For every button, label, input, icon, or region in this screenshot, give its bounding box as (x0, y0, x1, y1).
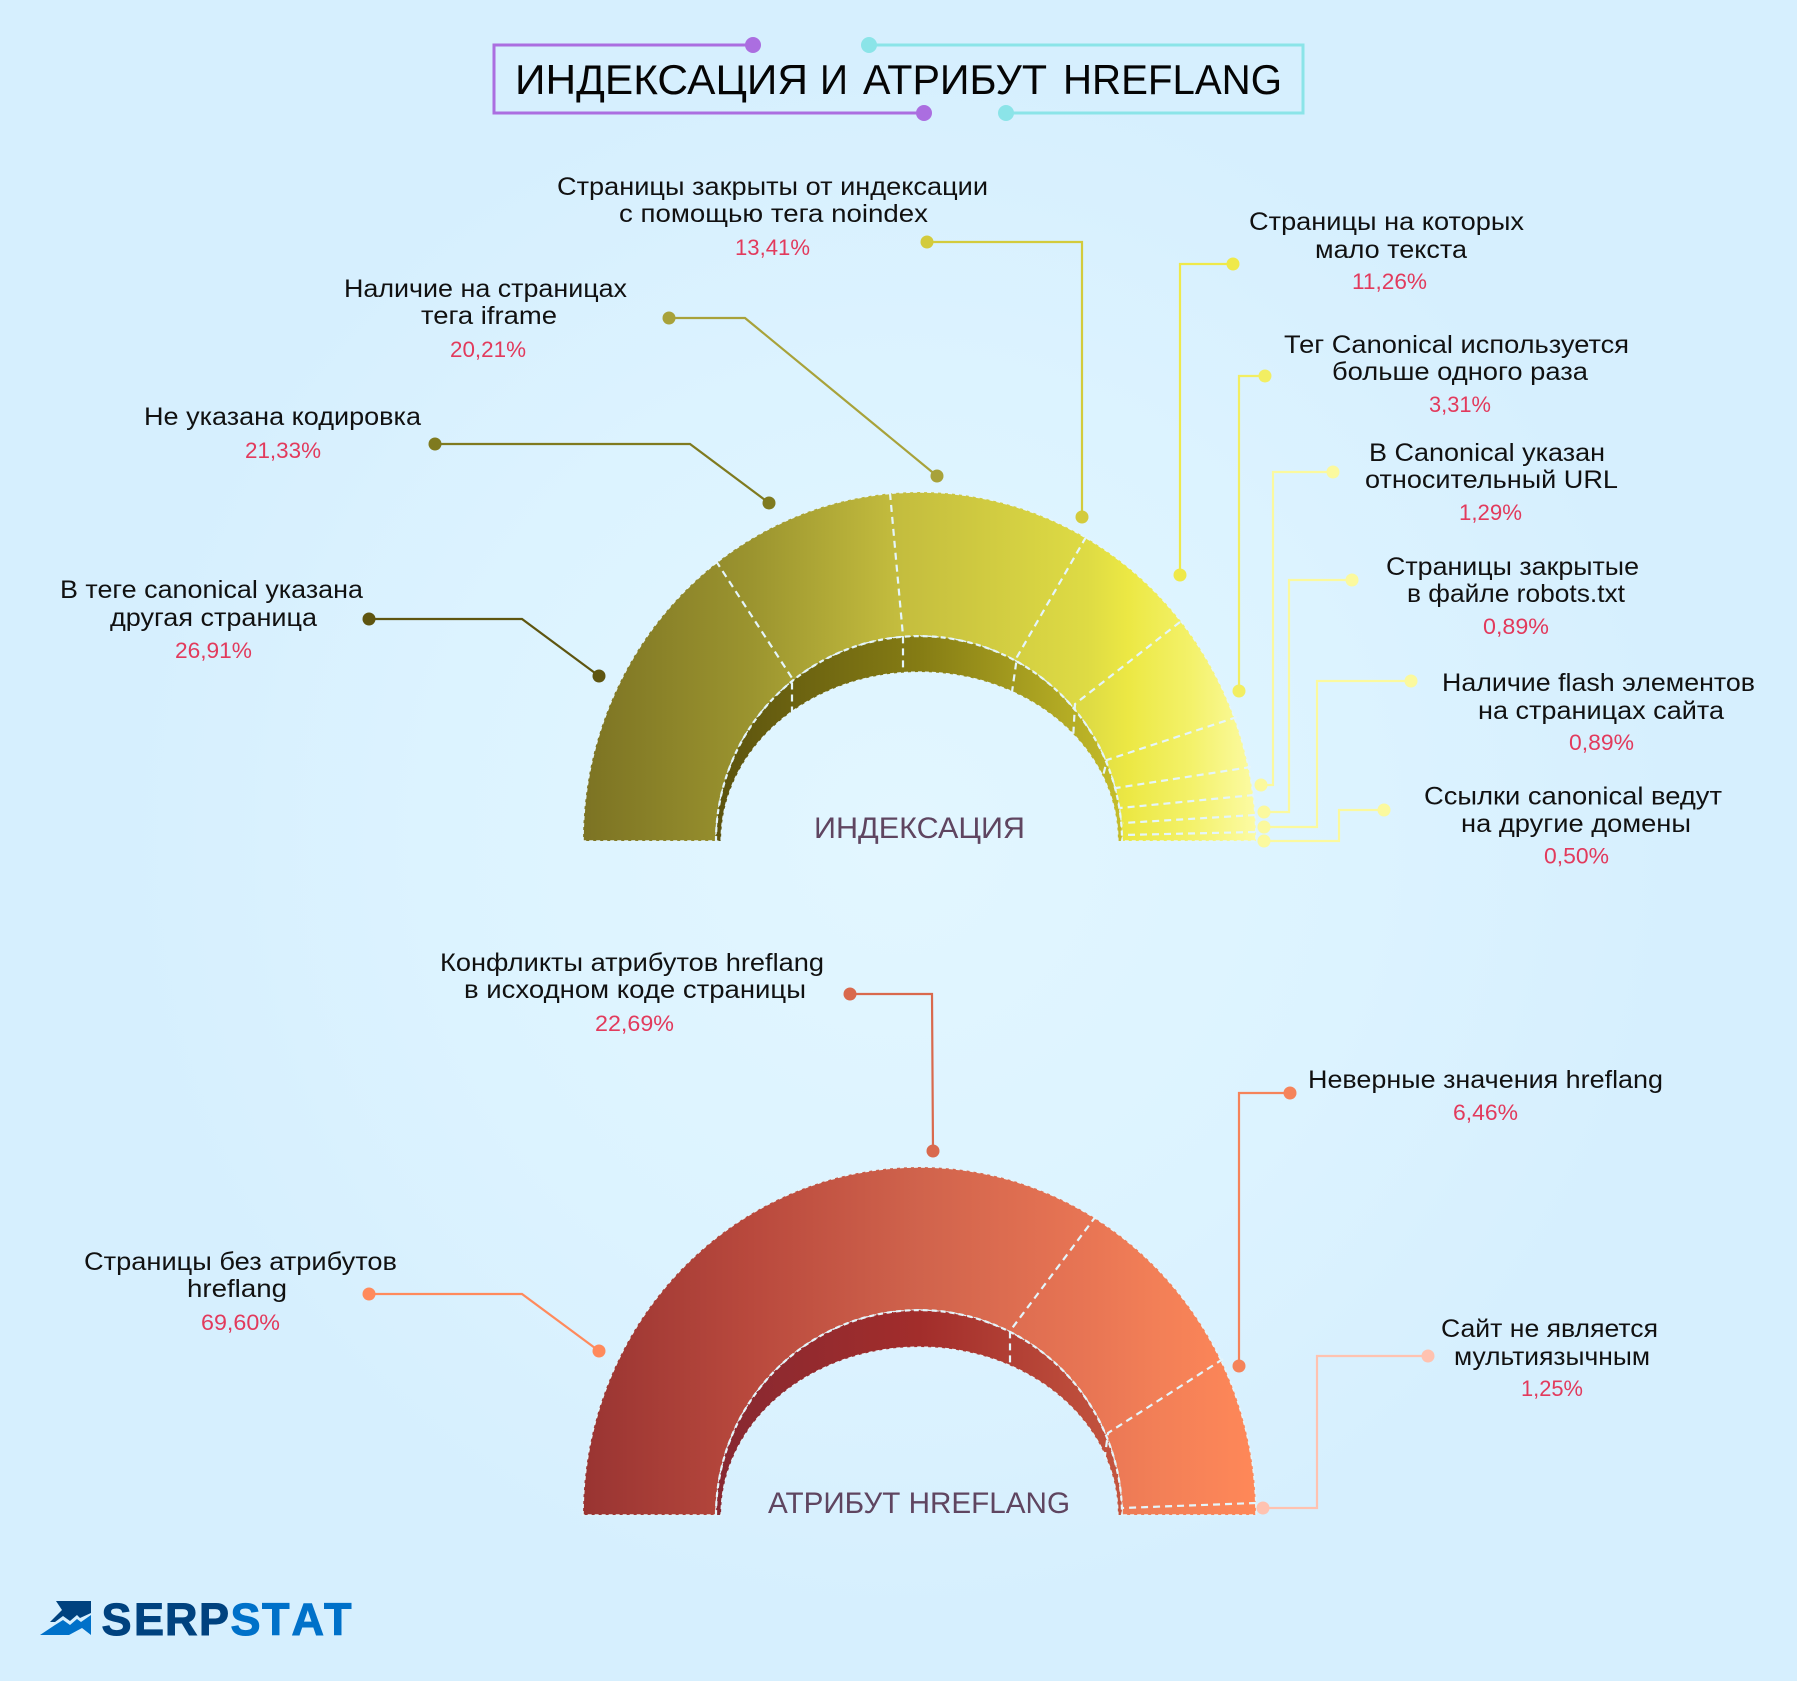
label: hreflang: АТРИБУТ HREFLANG (768, 1487, 1070, 1520)
callout: hreflang conflicts: 22,69% (595, 1011, 674, 1036)
label text: Страницы без атрибутов (84, 1248, 397, 1276)
band edge (716, 1310, 1122, 1515)
title (515, 56, 1282, 103)
label text: Неверные значения hreflang (1308, 1066, 1663, 1094)
leader line (1254, 466, 1340, 792)
callout: iframe: тега iframe (421, 302, 557, 330)
callout: hreflang conflicts (440, 949, 940, 1158)
callout: canonical other domains: на другие домены (1461, 810, 1691, 838)
callout: wrong hreflang values (1232, 1066, 1663, 1372)
callout: canonical other domains: 0,50% (1544, 844, 1609, 868)
leader line (662, 312, 944, 482)
callout: little text (1174, 208, 1525, 582)
callout: canonical used more than once (1232, 331, 1629, 698)
leader line (1258, 574, 1358, 818)
leader line (1232, 1086, 1296, 1372)
label text: Конфликты атрибутов hreflang (440, 949, 824, 977)
callout: canonical other page: 26,91% (175, 638, 252, 663)
callout: wrong hreflang values: 6,46% (1453, 1100, 1518, 1125)
callout: flash: 0,89% (1569, 730, 1634, 755)
callout: canonical other domains (1258, 782, 1723, 868)
purple frame line (494, 37, 932, 121)
label text: Страницы закрытые (1386, 553, 1639, 581)
inner dark band (716, 636, 1122, 841)
callout: noindex (557, 173, 1088, 524)
leader line (1256, 1350, 1434, 1514)
wordmark: STAT (230, 1594, 352, 1645)
callout: canonical other page: другая страница (110, 604, 317, 632)
callout: canonical used more than once: 3,31% (1429, 392, 1491, 417)
title frame with text (494, 37, 1303, 121)
label text: Сайт не является (1441, 1315, 1658, 1343)
outer ring segments (583, 1167, 1256, 1515)
leader line (362, 1288, 606, 1358)
callout: not multilingual: 1,25% (1521, 1376, 1583, 1401)
label text: Наличие flash элементов (1442, 669, 1755, 697)
leader line (1174, 258, 1240, 582)
callout: little text: мало текста (1315, 236, 1467, 264)
callout: canonical used more than once: больше одного раза (1332, 358, 1588, 386)
callout: no encoding (144, 403, 776, 510)
callout: canonical other page (60, 576, 606, 682)
label text: Страницы на которых (1249, 208, 1525, 236)
outer ring segments (583, 492, 1256, 841)
callout: flash: на страницах сайта (1478, 697, 1724, 725)
title: ИНДЕКСАЦИЯ (515, 56, 808, 103)
callout: robots.txt: в файле robots.txt (1407, 580, 1625, 608)
teal frame line (861, 37, 1303, 121)
segment dividers (716, 493, 1255, 835)
callout: relative URL: относительный URL (1365, 466, 1618, 494)
title: И (820, 56, 848, 103)
wordmark: SERP (102, 1594, 229, 1645)
callout: flash (1258, 669, 1755, 834)
callout: pages without hreflang: hreflang (187, 1275, 287, 1303)
label: indexing: ИНДЕКСАЦИЯ (814, 812, 1025, 845)
title: HREFLANG (1063, 56, 1282, 103)
leader line (1258, 804, 1390, 848)
chart: hreflang arch (583, 1167, 1256, 1520)
inner dark band (716, 1310, 1122, 1515)
callout: little text: 11,26% (1352, 269, 1427, 294)
callout: robots.txt: 0,89% (1483, 614, 1549, 639)
callout: iframe (344, 275, 944, 482)
band edge (716, 636, 1122, 841)
callout: robots.txt (1258, 553, 1639, 818)
callout: hreflang conflicts: в исходном коде страницы (464, 976, 806, 1004)
label text: Страницы закрыты от индексации (557, 173, 988, 201)
title: АТРИБУТ (863, 56, 1047, 103)
label text: Не указана кодировка (144, 403, 421, 431)
leader line (362, 612, 606, 682)
icon: logo arrow and chart (40, 1601, 91, 1635)
callout: noindex: с помощью тега noindex (619, 200, 929, 228)
logo: Serpstat (40, 1594, 352, 1645)
segment dividers (1010, 1216, 1256, 1508)
callout: relative URL (1254, 439, 1618, 792)
label text: В Canonical указан (1369, 439, 1605, 467)
callout: not multilingual: мультиязычным (1454, 1343, 1650, 1371)
callout: pages without hreflang: 69,60% (201, 1310, 280, 1335)
callout: noindex: 13,41% (735, 235, 810, 260)
label text: В теге canonical указана (60, 576, 363, 604)
callout: pages without hreflang (84, 1248, 606, 1358)
chart: indexing arch (583, 492, 1256, 845)
callout: relative URL: 1,29% (1459, 500, 1522, 525)
label text: Ссылки canonical ведут (1424, 782, 1723, 810)
callout: no encoding: 21,33% (245, 438, 321, 463)
label text: Тег Canonical используется (1284, 331, 1629, 359)
leader line (920, 236, 1088, 524)
leader line (428, 438, 776, 510)
callout: not multilingual (1256, 1315, 1658, 1514)
leader line (1258, 674, 1418, 834)
callout: iframe: 20,21% (450, 337, 526, 362)
leader line (844, 988, 940, 1158)
wordmark (102, 1594, 352, 1645)
leader line (1232, 370, 1272, 698)
label text: Наличие на страницах (344, 275, 628, 303)
